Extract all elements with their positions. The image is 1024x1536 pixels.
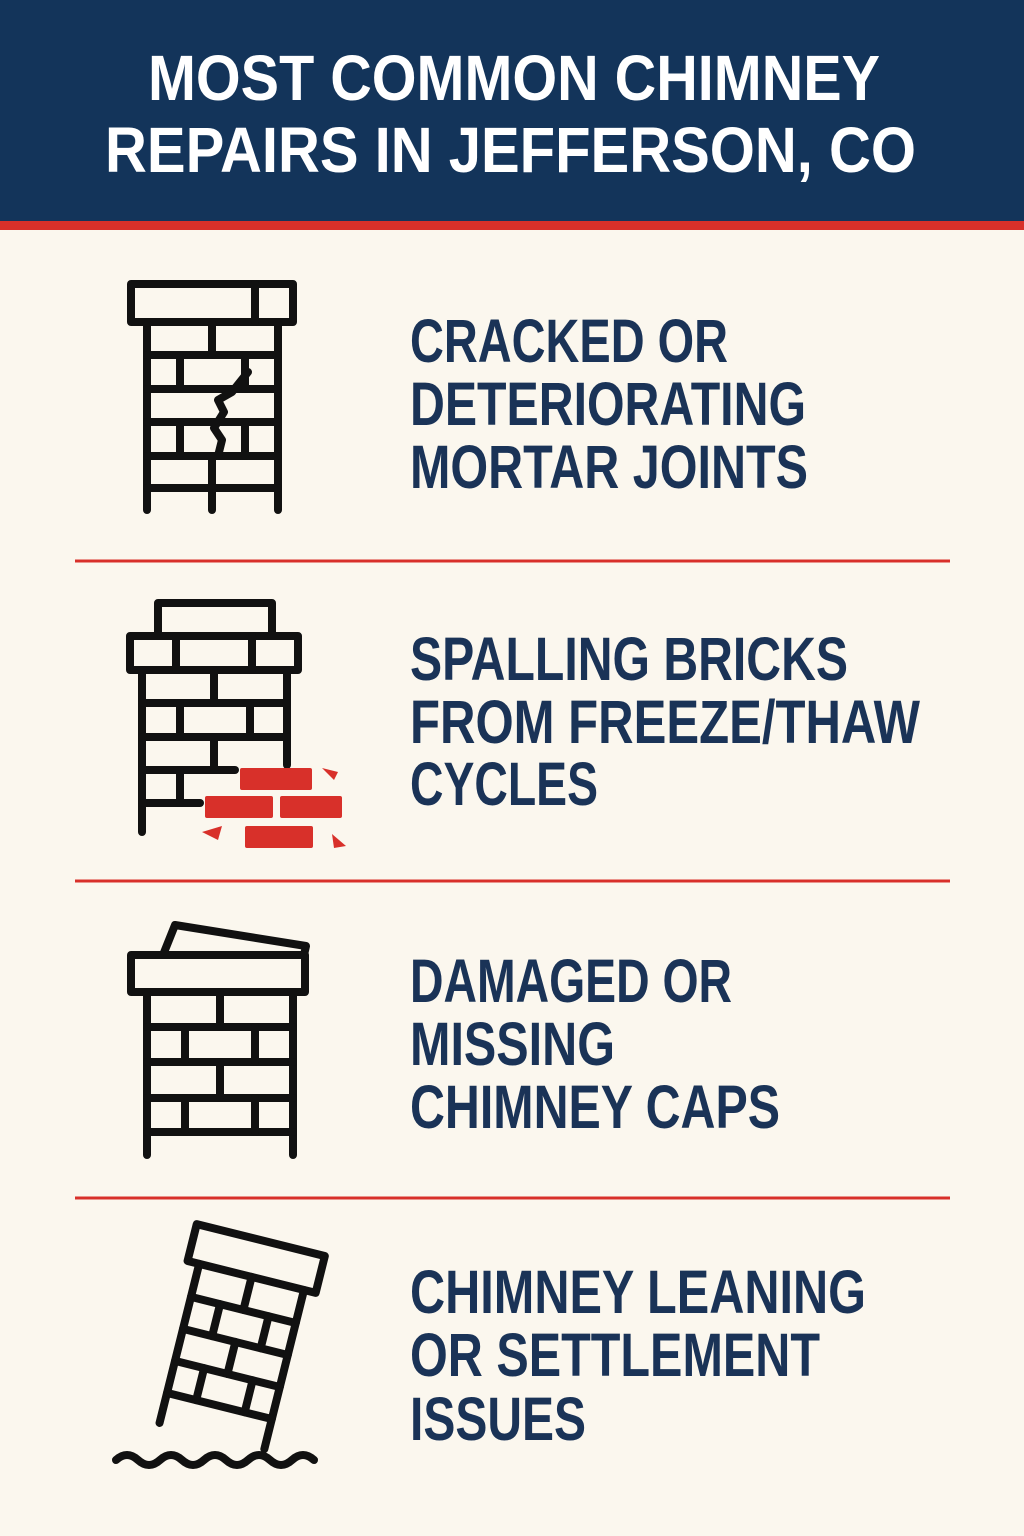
icon: cracked chimney xyxy=(131,284,293,510)
title: MOST COMMON CHIMNEY xyxy=(148,42,880,114)
text: chimney caps: MISSING xyxy=(410,1010,615,1078)
text: mortar joints: DETERIORATING xyxy=(410,370,806,438)
text: spalling bricks xyxy=(410,625,920,818)
text: chimney caps: CHIMNEY CAPS xyxy=(410,1073,780,1141)
text: chimney caps xyxy=(410,947,780,1141)
text: chimney caps: DAMAGED OR xyxy=(410,947,732,1015)
text: leaning xyxy=(410,1258,866,1453)
header banner xyxy=(0,0,1024,230)
text: mortar joints: MORTAR JOINTS xyxy=(410,433,808,501)
text: mortar joints: CRACKED OR xyxy=(410,307,728,375)
text: leaning: OR SETTLEMENT xyxy=(410,1321,820,1389)
text: leaning: ISSUES xyxy=(410,1385,586,1453)
text: leaning: CHIMNEY LEANING xyxy=(410,1258,866,1326)
title: REPAIRS IN JEFFERSON, CO xyxy=(105,114,916,186)
text: spalling bricks: CYCLES xyxy=(410,750,598,818)
icon: spalling bricks xyxy=(130,603,346,848)
icon: chimney with damaged cap xyxy=(131,925,306,1155)
text: mortar joints xyxy=(410,307,808,501)
icon: leaning chimney xyxy=(116,1224,325,1465)
title xyxy=(105,42,916,186)
text: spalling bricks: SPALLING BRICKS xyxy=(410,625,848,693)
